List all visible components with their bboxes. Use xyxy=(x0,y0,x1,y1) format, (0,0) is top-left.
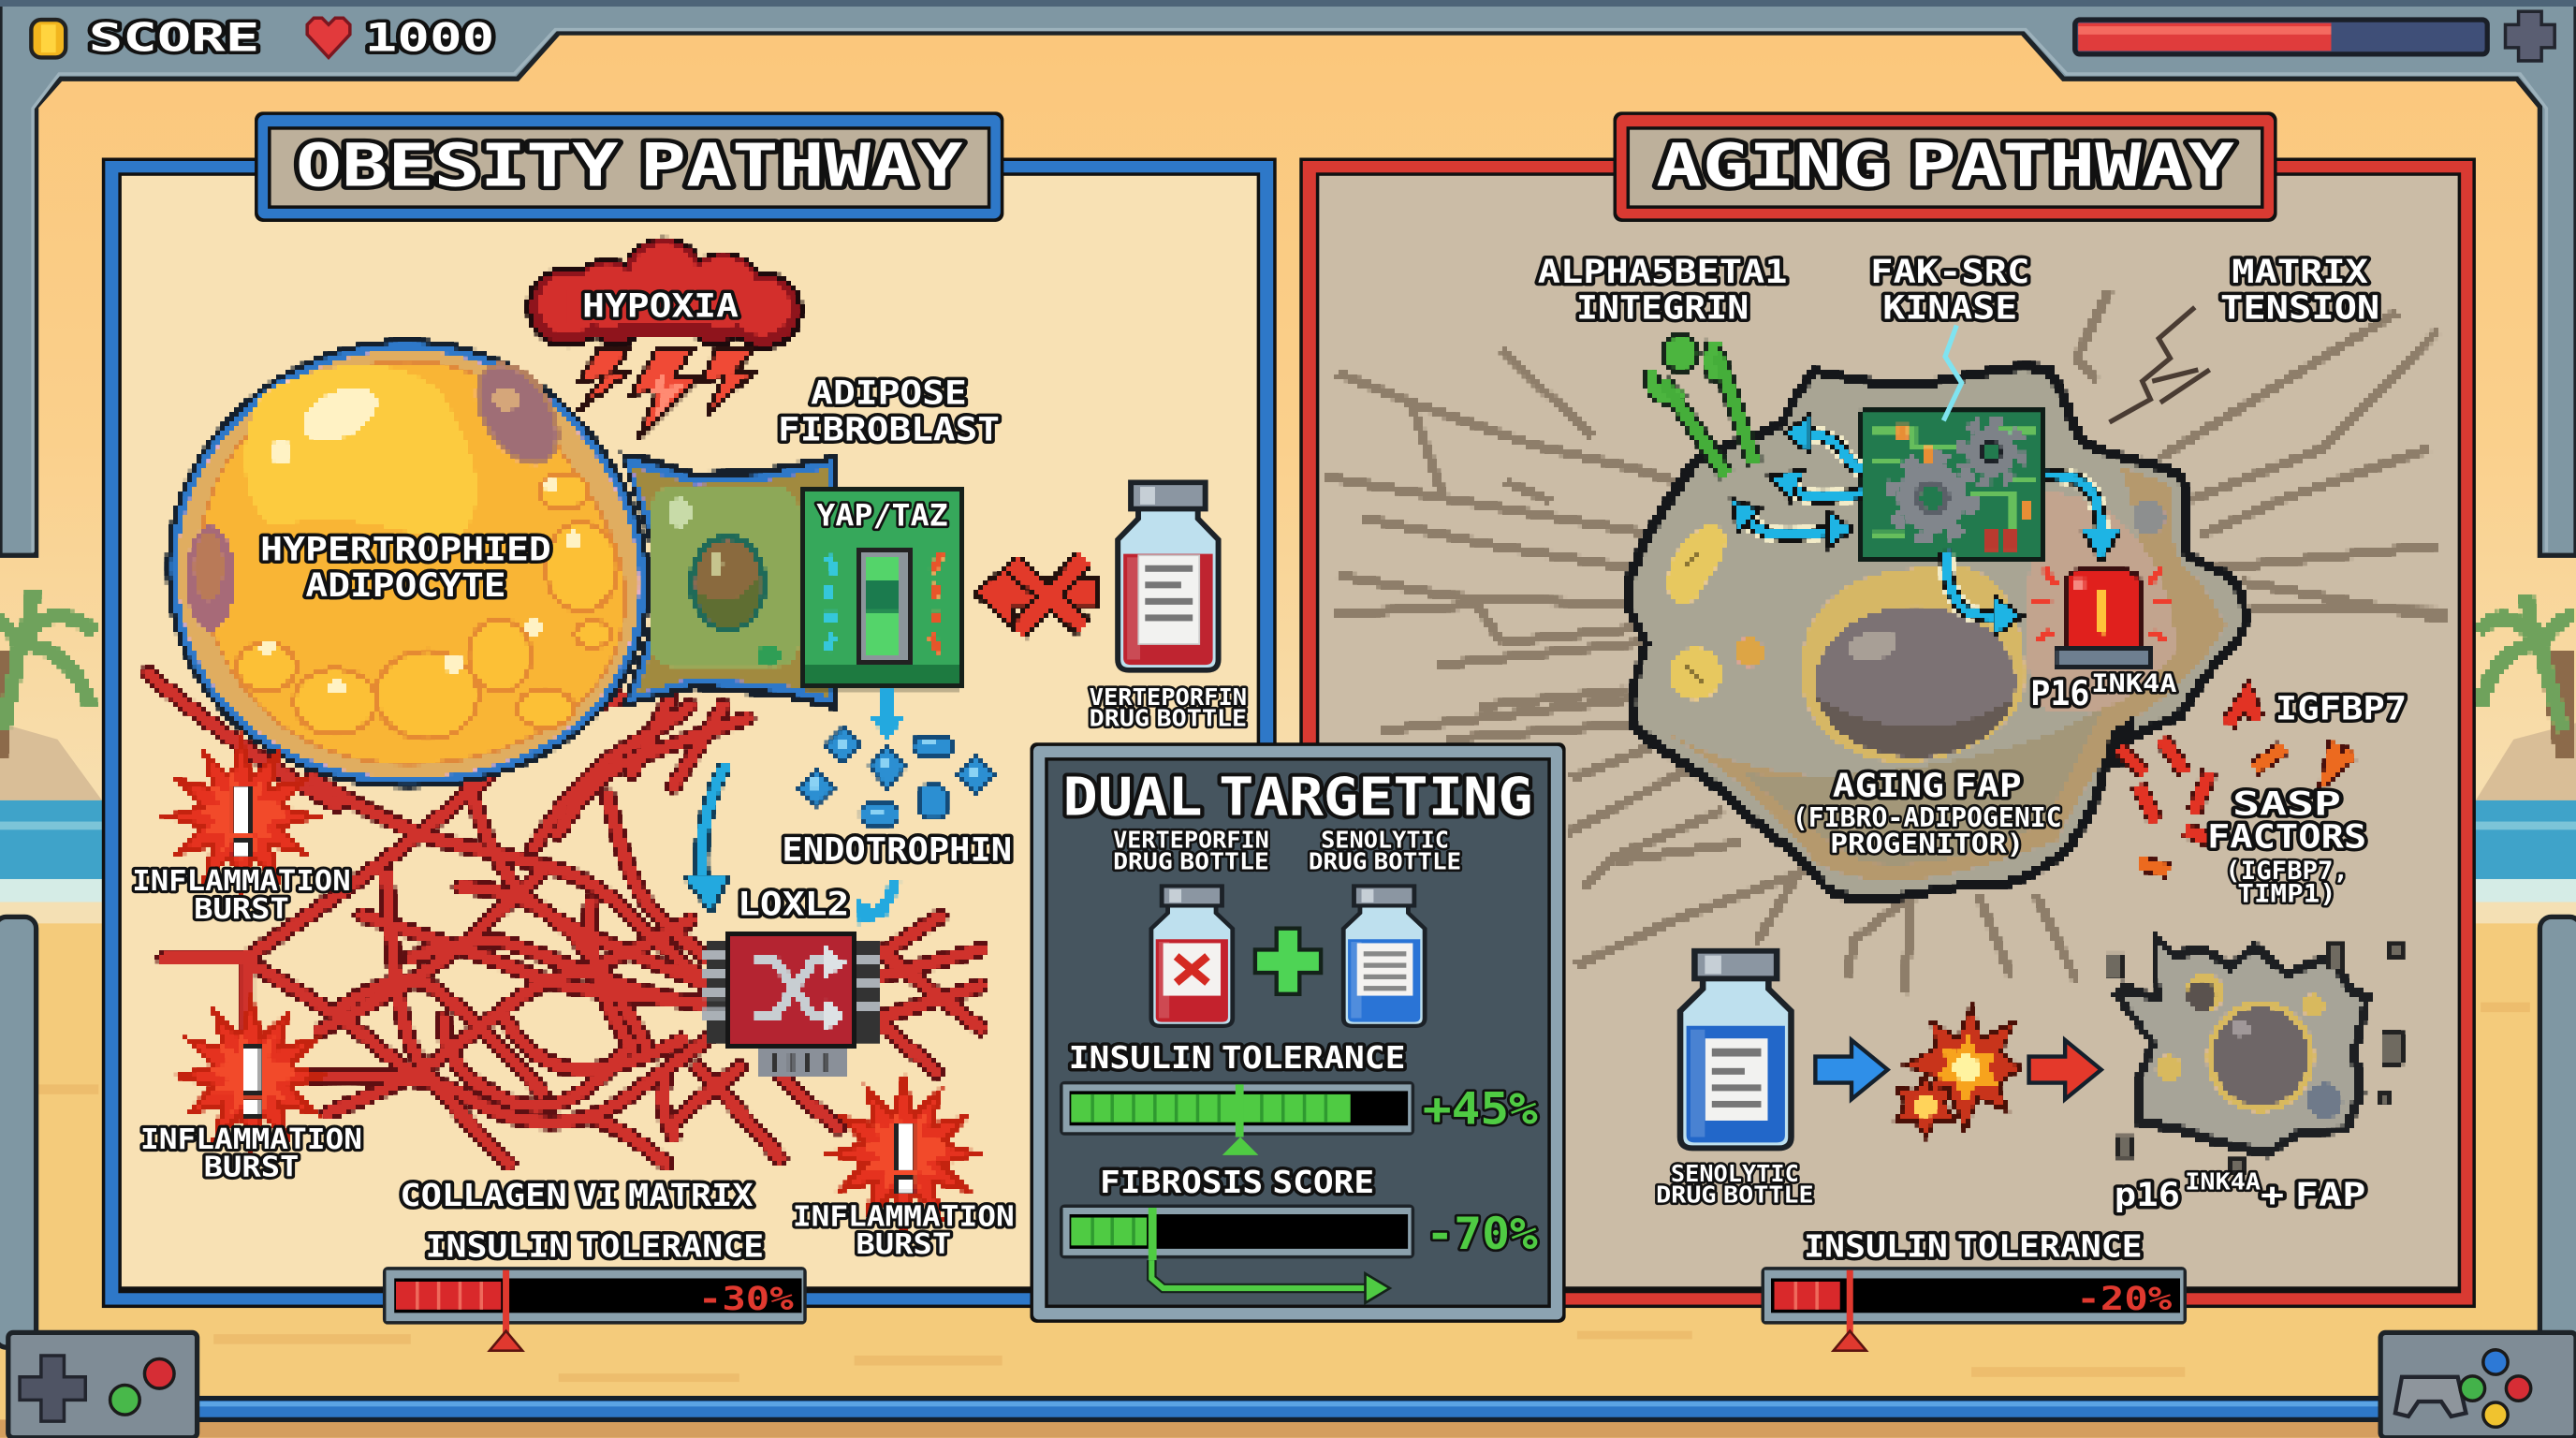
icon: endotrophin fragments xyxy=(798,728,994,825)
fibroblast label: FIBROBLAST xyxy=(778,410,1000,448)
label: aging FAP: (FIBRO-ADIPOGENIC xyxy=(1793,802,2062,833)
arrow: blue to explosion xyxy=(1815,1040,1888,1099)
verteporfin label xyxy=(1113,827,1269,874)
p16 label xyxy=(2030,670,2177,713)
label: integrin: INTEGRIN xyxy=(1576,288,1749,327)
collagen fibres xyxy=(148,674,981,1164)
panel: dual targeting xyxy=(1030,742,1566,1323)
p16 label: P16 xyxy=(2030,673,2089,713)
senolytic label: DRUG BOTTLE xyxy=(1656,1181,1814,1209)
value: +45%: +45% xyxy=(1423,1083,1538,1135)
hud: health bar xyxy=(2075,20,2487,54)
icon: plus xyxy=(1255,929,1321,994)
p16+ FAP label: + FAP xyxy=(2261,1176,2365,1214)
score value: 1000 xyxy=(365,14,494,60)
icon: FAK-SRC circuit board xyxy=(1860,409,2047,562)
adipocyte label xyxy=(260,530,551,605)
icon: hypoxia cloud with lightning xyxy=(526,237,803,440)
senolytic label: SENOLYTIC xyxy=(1321,827,1449,854)
icon: p16+ FAP dying cell xyxy=(2106,929,2404,1173)
senolytic label: SENOLYTIC xyxy=(1671,1160,1799,1187)
icon: verteporfin bottle xyxy=(1118,482,1219,670)
icon: heart xyxy=(307,18,350,57)
arrow: red to dead cell xyxy=(2029,1040,2101,1099)
icon: p16 alarm xyxy=(2030,568,2174,668)
label: integrin: ALPHA5BETA1 xyxy=(1538,253,1788,291)
label: aging FAP xyxy=(1793,767,2062,859)
LOXL2 label: LOXL2 xyxy=(738,886,849,924)
insulin tolerance label: INSULIN TOLERANCE xyxy=(426,1228,764,1265)
controller panel left xyxy=(8,1332,198,1438)
p16+ FAP label: INK4A xyxy=(2185,1168,2261,1196)
icon: dpad top xyxy=(2506,11,2554,61)
icon: gamepad xyxy=(2395,1377,2466,1416)
icon: red button xyxy=(144,1358,174,1388)
gauge: aging insulin tolerance: -20% xyxy=(2076,1280,2172,1318)
label: SASP factors: FACTORS xyxy=(2207,818,2366,857)
icon: adipose fibroblast cell xyxy=(620,452,840,712)
verteporfin label: VERTEPORFIN xyxy=(1113,827,1269,854)
panel frame xyxy=(102,157,1277,1308)
palm tree right xyxy=(2478,594,2576,759)
fibroblast label xyxy=(778,374,1000,448)
icon: inflammation burst 2 xyxy=(179,1001,324,1152)
icon: red bottle xyxy=(1151,886,1233,1026)
arrow: blocked inhibition xyxy=(974,559,1097,631)
senolytic label: DRUG BOTTLE xyxy=(1309,847,1461,874)
icon: inflammation burst 3 xyxy=(831,1078,976,1229)
title plate xyxy=(1614,111,2277,222)
icon: colored buttons xyxy=(2460,1350,2531,1427)
verteporfin label: VERTEPORFIN xyxy=(1090,683,1247,711)
gauge: combined insulin tolerance xyxy=(1060,1081,1414,1155)
label: kinase xyxy=(1870,253,2029,327)
icon: hypertrophied adipocyte xyxy=(166,339,651,788)
label: matrix tension: MATRIX xyxy=(2232,253,2368,291)
verteporfin label xyxy=(1090,683,1247,732)
heading: OBESITY PATHWAY xyxy=(296,130,962,199)
burst label 2 xyxy=(140,1123,362,1184)
label: IGFBP7: IGFBP7 xyxy=(2276,690,2407,728)
fibroblast label: ADIPOSE xyxy=(811,374,967,413)
heading: AGING PATHWAY xyxy=(1656,130,2234,199)
icon: alpha5beta1 integrin xyxy=(1652,335,1754,475)
icon: LOXL2 chip xyxy=(703,930,879,1077)
burst label 3: INFLAMMATION xyxy=(793,1200,1015,1233)
arrows: signalling from board xyxy=(1732,414,2121,636)
collagen label: COLLAGEN VI MATRIX xyxy=(400,1177,754,1213)
panel: aging pathway xyxy=(1299,111,2476,1351)
panel frame xyxy=(1299,157,2476,1308)
label: kinase: FAK-SRC xyxy=(1870,253,2029,291)
label: aging FAP: PROGENITOR) xyxy=(1830,829,2024,859)
burst label 2: BURST xyxy=(204,1152,299,1184)
burst label 3 xyxy=(793,1200,1015,1261)
senolytic label xyxy=(1309,827,1461,874)
heading: DUAL TARGETING xyxy=(1063,768,1533,829)
burst label 1: BURST xyxy=(194,893,289,926)
insulin label: INSULIN TOLERANCE xyxy=(1069,1039,1405,1076)
insulin tolerance label: INSULIN TOLERANCE xyxy=(1804,1228,2143,1265)
burst label 2: INFLAMMATION xyxy=(140,1123,362,1156)
icon: green button xyxy=(110,1386,139,1415)
icon: YAP/TAZ switch board xyxy=(801,487,964,690)
arrow: endotrophin to LOXL2 xyxy=(857,879,896,925)
value: -70%: -70% xyxy=(1426,1209,1538,1260)
hud: score xyxy=(31,14,494,60)
senolytic label xyxy=(1656,1160,1814,1209)
hypoxia label: HYPOXIA xyxy=(582,287,739,326)
p16+ FAP label xyxy=(2115,1168,2365,1214)
verteporfin label: DRUG BOTTLE xyxy=(1113,847,1269,874)
gauge: fibrosis score xyxy=(1060,1204,1414,1260)
verteporfin label: DRUG BOTTLE xyxy=(1090,705,1247,732)
burst label 1: INFLAMMATION xyxy=(132,865,351,898)
adipocyte label: ADIPOCYTE xyxy=(305,566,506,605)
icon: coin xyxy=(31,20,66,57)
palm tree left xyxy=(0,592,95,759)
arrow: YAP to endotrophin xyxy=(869,690,905,740)
fibrosis label: FIBROSIS SCORE xyxy=(1100,1164,1374,1200)
gauge: obesity insulin tolerance xyxy=(383,1267,807,1351)
adipocyte label: HYPERTROPHIED xyxy=(260,530,551,568)
burst label 1 xyxy=(132,865,351,926)
icon: aging FAP cell xyxy=(1622,362,2249,904)
matrix cracks xyxy=(1325,289,2446,994)
panel frame xyxy=(1030,742,1566,1323)
title plate xyxy=(255,111,1003,222)
gauge: obesity insulin tolerance: -30% xyxy=(698,1280,794,1318)
arrow: fibrosis reduction xyxy=(1151,1260,1390,1303)
label: matrix tension: TENSION xyxy=(2220,288,2379,327)
label: matrix tension xyxy=(2220,253,2379,327)
signal bolt xyxy=(1943,326,1962,420)
label: kinase: KINASE xyxy=(1882,288,2017,327)
gauge: aging insulin tolerance xyxy=(1761,1267,2187,1351)
icon: explosion xyxy=(1895,1005,2021,1137)
label: SASP factors: TIMP1) xyxy=(2237,881,2336,909)
p16+ FAP label: p16 xyxy=(2115,1176,2180,1214)
icon: inflammation burst 1 xyxy=(169,741,314,892)
p16 label: INK4A xyxy=(2091,670,2177,698)
label: aging FAP: AGING FAP xyxy=(1833,767,2022,805)
icon: blue bottle xyxy=(1343,886,1425,1026)
icon: senolytic bottle xyxy=(1680,951,1791,1148)
label: SASP factors: (IGFBP7, xyxy=(2225,858,2349,886)
arrow: fibroblast to LOXL2 xyxy=(683,764,729,914)
endotrophin label: ENDOTROPHIN xyxy=(782,831,1012,870)
controller panel right xyxy=(2380,1332,2576,1438)
YAP/TAZ label: YAP/TAZ xyxy=(816,500,948,534)
icon: SASP fragments xyxy=(2119,695,2352,871)
dark tension cracks xyxy=(2110,307,2210,422)
score label: SCORE xyxy=(89,14,259,60)
label: integrin xyxy=(1538,253,1788,327)
panel: obesity pathway xyxy=(102,111,1277,1351)
icon: dpad xyxy=(20,1356,85,1421)
burst label 3: BURST xyxy=(856,1228,951,1261)
label: SASP factors xyxy=(2207,785,2366,909)
label: SASP factors: SASP xyxy=(2232,785,2341,824)
